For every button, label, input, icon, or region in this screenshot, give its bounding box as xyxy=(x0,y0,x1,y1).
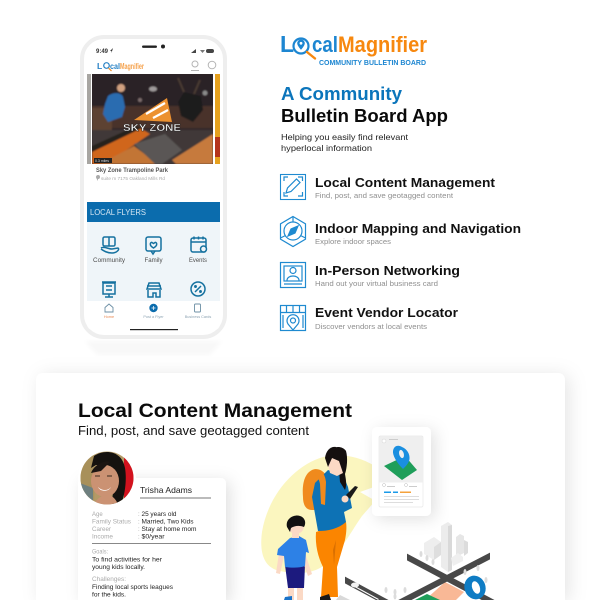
status bar xyxy=(96,44,214,55)
phone header icons xyxy=(191,61,216,70)
road marking xyxy=(352,585,378,600)
listing address: suite m 7175 Oakland Mills Rd xyxy=(101,176,165,182)
persona goals: young kids locally. xyxy=(92,565,145,571)
ground plane xyxy=(336,595,350,600)
persona facts: : xyxy=(138,512,140,518)
woman head and hair xyxy=(329,447,347,490)
persona portrait xyxy=(80,452,136,504)
feature: in-person networking xyxy=(280,262,460,288)
phone app logo xyxy=(97,61,144,71)
child arms xyxy=(276,553,312,576)
map tile xyxy=(384,456,417,480)
road car xyxy=(351,582,359,588)
yellow backdrop xyxy=(261,455,376,573)
brand logo: L xyxy=(280,31,294,57)
icon: compass hexagon xyxy=(280,216,306,246)
backpack strap xyxy=(312,470,326,505)
sky zone photo: SKY ZONE xyxy=(123,122,181,134)
post card bubble xyxy=(360,427,431,516)
local flyers banner: LOCAL FLYERS xyxy=(90,208,146,217)
card background xyxy=(78,478,226,600)
heading: bulletin board app: Bulletin Board App xyxy=(281,106,448,126)
nav: home: Home xyxy=(104,315,114,319)
heading: a community: A Community xyxy=(281,84,402,104)
isometric city xyxy=(336,522,494,600)
panel heading: Local Content Management xyxy=(78,400,353,422)
child legs xyxy=(288,586,303,600)
illustration: mother and child using app xyxy=(261,427,494,600)
large map pin xyxy=(461,573,489,600)
persona facts xyxy=(92,512,196,540)
listing address xyxy=(96,175,165,182)
persona card xyxy=(78,449,226,600)
child head xyxy=(288,518,304,534)
feature title: In-Person Networking xyxy=(315,263,460,278)
backpack xyxy=(303,469,326,510)
icon: pencil frame xyxy=(280,174,306,200)
feature title: Local Content Management xyxy=(315,175,496,190)
icon: business card xyxy=(280,262,306,288)
sky zone logo xyxy=(134,98,172,122)
persona goals: Goals: xyxy=(92,550,108,556)
icon: family xyxy=(146,237,161,254)
persona goals: To find activities for her xyxy=(92,558,162,564)
feature subtitle: Find, post, and save geotagged content xyxy=(315,191,454,200)
persona facts: $0/year xyxy=(142,534,164,540)
woman shoe xyxy=(320,594,331,600)
persona facts: : xyxy=(138,527,140,533)
feature title: Event Vendor Locator xyxy=(315,305,458,320)
brand logo: cal xyxy=(312,32,338,57)
feature title: Indoor Mapping and Navigation xyxy=(315,221,521,236)
panel subheading: Find, post, and save geotagged content xyxy=(78,423,309,438)
icon: community xyxy=(101,237,119,253)
icon: events xyxy=(191,236,206,252)
icon: shop xyxy=(147,283,161,297)
persona goals xyxy=(92,550,162,571)
child xyxy=(276,515,312,600)
phone app logo: L xyxy=(97,61,102,71)
persona facts: Married, Two Kids xyxy=(142,520,194,526)
phone reflection xyxy=(85,341,222,355)
persona facts: 25 years old xyxy=(142,512,176,518)
label: events: Events xyxy=(189,258,207,264)
persona challenges: Finding local sports leagues xyxy=(92,585,173,591)
icon: discount xyxy=(191,282,205,296)
child shorts xyxy=(285,565,305,588)
sky zone photo: 0.3 miles xyxy=(95,159,109,163)
feature subtitle: Hand out your virtual business card xyxy=(315,279,438,288)
feature: local content management xyxy=(280,174,496,200)
persona facts: Age xyxy=(92,512,103,518)
feature: indoor mapping and navigation xyxy=(280,216,521,246)
persona facts: : xyxy=(138,520,140,526)
phone mockup xyxy=(82,37,225,355)
persona challenges: for the kids. xyxy=(92,592,126,598)
feature subtitle: Explore indoor spaces xyxy=(315,237,391,246)
phone app logo: cal xyxy=(110,61,120,71)
icon: kiosk xyxy=(102,282,116,297)
label: family: Family xyxy=(144,258,162,264)
bottom navigation xyxy=(87,301,220,331)
persona facts: Family Status xyxy=(92,520,131,526)
phone app logo: Magnifier xyxy=(120,61,144,71)
intro text: Helping you easily find relevant xyxy=(281,132,409,142)
persona challenges: Challenges: xyxy=(92,577,126,583)
feature: event vendor locator xyxy=(280,305,458,331)
roads xyxy=(345,553,494,600)
icon: store with pin xyxy=(280,306,306,330)
local flyers banner xyxy=(87,202,220,222)
label: community: Community xyxy=(93,258,125,264)
persona challenges xyxy=(92,577,173,598)
buildings xyxy=(424,522,468,572)
sky zone photo xyxy=(92,74,213,164)
woman phone and hand xyxy=(342,486,358,502)
gray previous card strip xyxy=(87,74,91,164)
next card strip xyxy=(215,74,220,164)
persona facts: Career xyxy=(92,527,111,533)
brand logo: Magnifier xyxy=(338,32,427,57)
intro text: hyperlocal information xyxy=(281,143,372,153)
persona facts: Income xyxy=(92,534,114,540)
panel background xyxy=(36,373,565,600)
location pin xyxy=(393,446,410,469)
woman trousers xyxy=(316,522,346,597)
woman top xyxy=(312,470,352,531)
nav: business cards: Business Cards xyxy=(185,315,211,319)
brand logo: COMMUNITY BULLETIN BOARD xyxy=(319,60,426,67)
flyer grid panel xyxy=(87,222,220,302)
trees xyxy=(384,551,488,600)
phone body xyxy=(82,37,225,337)
persona facts: Stay at home mom xyxy=(142,527,196,533)
persona facts: : xyxy=(138,534,140,540)
feature subtitle: Discover vendors at local events xyxy=(315,322,427,331)
panel: local content management detail xyxy=(36,373,565,600)
street block xyxy=(425,582,464,600)
home indicator xyxy=(130,329,178,330)
intro text xyxy=(281,132,409,153)
brand logo xyxy=(280,31,427,67)
status bar: 9:49 xyxy=(96,49,109,55)
child shirt xyxy=(277,536,309,568)
child shoe xyxy=(284,596,292,600)
persona name: Trisha Adams xyxy=(140,485,192,495)
listing title: Sky Zone Trampoline Park xyxy=(96,168,169,174)
nav: post a flyer: Post a Flyer xyxy=(143,315,164,319)
